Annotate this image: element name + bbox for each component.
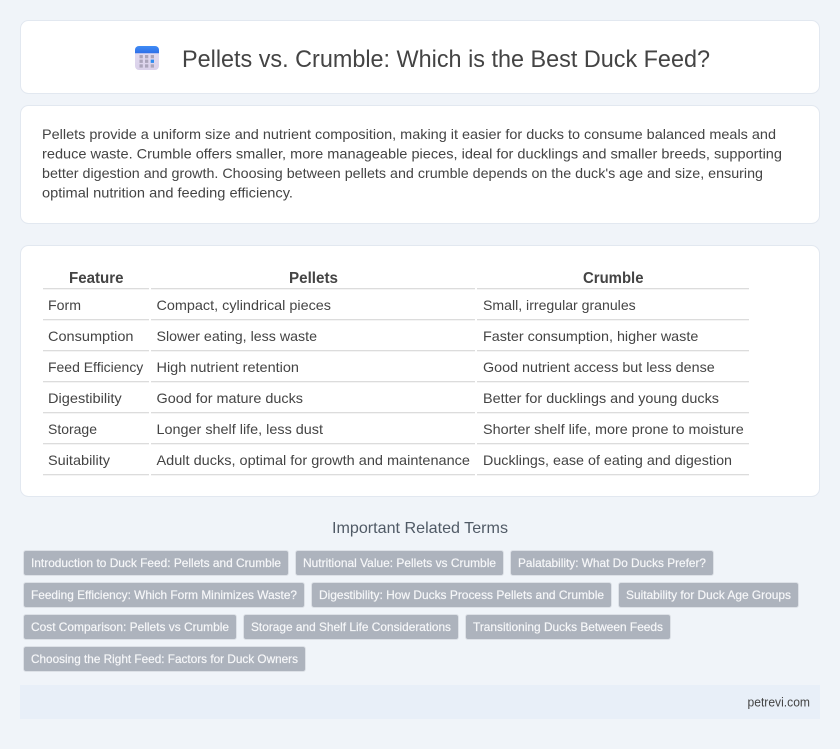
- text block: introduction paragraph: Pellets provide a uniform size and nutrient composition, making it easier for ducks to consume balanced meals and: [42, 126, 776, 142]
- related terms tags: Introduction to Duck Feed: Pellets and Crumble: [31, 556, 281, 570]
- table row: Feed Efficiency: [48, 359, 715, 375]
- table row: Feed Efficiency: Feed Efficiency: [48, 359, 143, 375]
- table row: Storage: [48, 421, 744, 437]
- table row: Consumption: Faster consumption, higher waste: [483, 328, 699, 344]
- related terms tags: Storage and Shelf Life Considerations: [251, 620, 451, 634]
- table header row: Feature: [69, 270, 124, 287]
- panel: comparison table: [20, 246, 820, 496]
- icon: calendar: [135, 46, 159, 70]
- table row: Suitability: Adult ducks, optimal for growth and maintenance: [156, 452, 470, 468]
- text block: introduction paragraph: [42, 126, 782, 200]
- related terms tags: Feeding Efficiency: Which Form Minimizes Waste?: [31, 588, 297, 602]
- heading: Important Related Terms: Important Related Terms: [332, 520, 508, 537]
- table row: Form: Compact, cylindrical pieces: [156, 297, 331, 313]
- table row: Form: Small, irregular granules: [483, 297, 636, 313]
- table row: Storage: Longer shelf life, less dust: [156, 421, 323, 437]
- related terms tags: Transitioning Ducks Between Feeds: [473, 620, 663, 634]
- related terms tags: Choosing the Right Feed: Factors for Duck Owners: [31, 652, 298, 666]
- table row: Digestibility: [48, 390, 719, 406]
- related terms tags: Cost Comparison: Pellets vs Crumble: [31, 620, 229, 634]
- table row: Suitability: [48, 452, 732, 468]
- table row: Consumption: Slower eating, less waste: [156, 328, 317, 344]
- text block: introduction paragraph: optimal nutrition and feeding efficiency.: [42, 184, 293, 200]
- panel: introduction: [20, 106, 820, 224]
- table row: Consumption: Consumption: [48, 328, 134, 344]
- related terms tags: [24, 550, 798, 672]
- table header row: Pellets: [289, 270, 338, 287]
- table row: Suitability: Suitability: [48, 452, 110, 468]
- table row: Form: [48, 297, 636, 313]
- table row: Feed Efficiency: High nutrient retention: [156, 359, 299, 375]
- table row: Digestibility: Good for mature ducks: [156, 390, 303, 406]
- panel: header: [20, 20, 820, 94]
- related terms tags: Suitability for Duck Age Groups: [626, 588, 791, 602]
- title: Pellets vs. Crumble: Which is the Best Duck Feed?: [182, 46, 710, 73]
- table row: Form: Form: [48, 297, 81, 313]
- footer source text: petrevi.com: [748, 694, 810, 710]
- related terms tags: Digestibility: How Ducks Process Pellets and Crumble: [319, 588, 604, 602]
- table row: Suitability: Ducklings, ease of eating and digestion: [483, 452, 732, 468]
- table row: Storage: Storage: [48, 421, 97, 437]
- table header row: [69, 270, 644, 287]
- table row: Digestibility: Digestibility: [48, 390, 122, 406]
- table row: Digestibility: Better for ducklings and young ducks: [483, 390, 719, 406]
- table header row: Crumble: [583, 270, 644, 287]
- text block: introduction paragraph: reduce waste. Crumble offers smaller, more manageable pieces, ideal for ducklings and smaller breeds, supporting: [42, 146, 782, 162]
- table row: Consumption: [48, 328, 699, 344]
- related terms tags: Nutritional Value: Pellets vs Crumble: [303, 556, 496, 570]
- related terms tags: Palatability: What Do Ducks Prefer?: [518, 556, 706, 570]
- table row: Feed Efficiency: Good nutrient access but less dense: [483, 359, 715, 375]
- table row: Storage: Shorter shelf life, more prone to moisture: [483, 421, 744, 437]
- text block: introduction paragraph: better digestion and growth. Choosing between pellets and crumble depends on the duck's age and size, ensuring: [42, 165, 763, 181]
- footer: [20, 685, 820, 719]
